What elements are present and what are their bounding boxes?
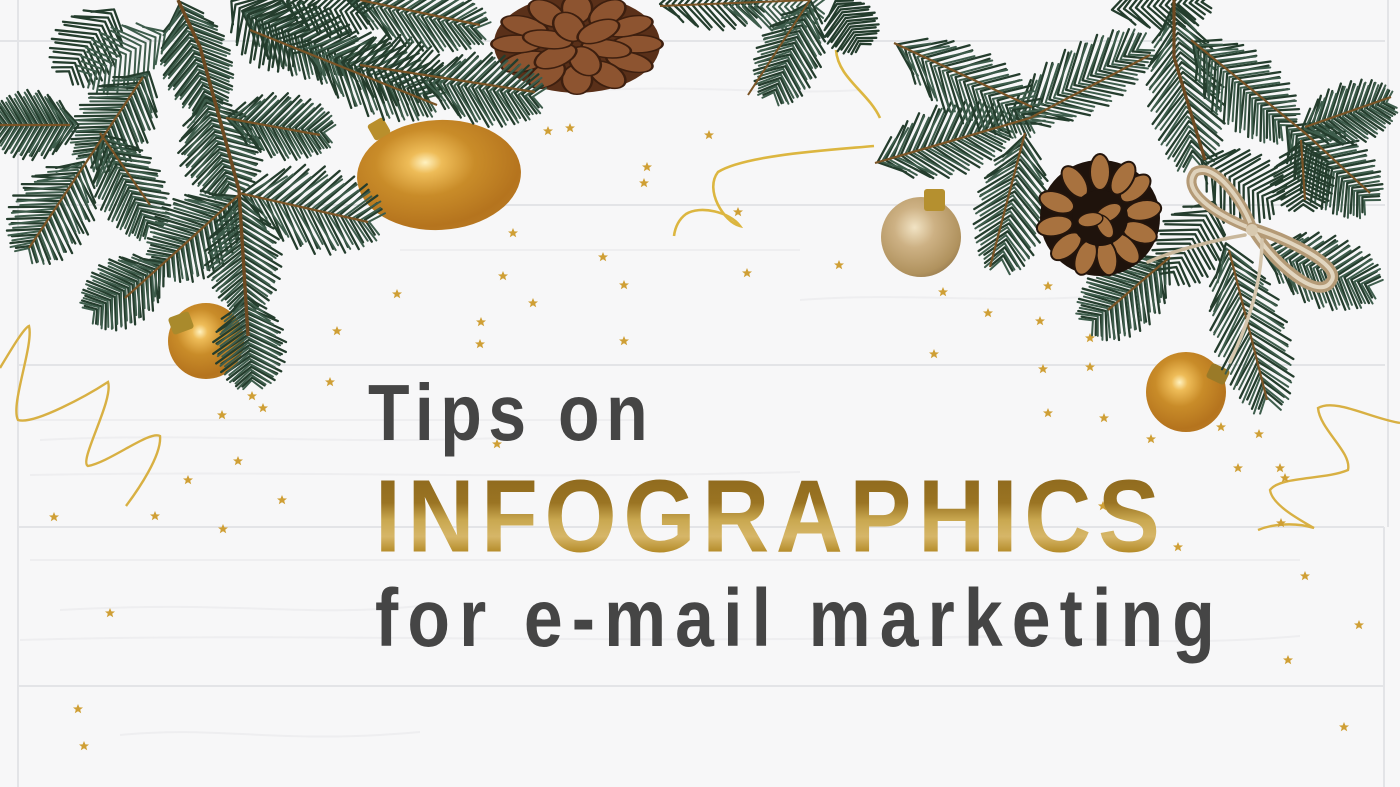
twine bow — [1148, 170, 1333, 362]
gold ribbon: center top — [836, 50, 880, 118]
gold ribbon: left — [0, 326, 160, 506]
title line: INFOGRAPHICS: INFOGRAPHICS — [375, 458, 1160, 574]
gold egg ornament — [354, 116, 524, 234]
pine branch: top center — [660, 0, 887, 113]
pine branch: right — [867, 0, 1400, 422]
scattered gold stars — [49, 123, 1364, 750]
pine cone: right — [1035, 154, 1163, 278]
pine cone: top — [491, 0, 663, 94]
gold ornament: right — [1146, 352, 1230, 432]
pine branch: top left — [0, 0, 549, 392]
title line: for e-mail marketing: for e-mail marketing — [375, 573, 1215, 664]
gold ornament: left — [168, 303, 244, 379]
title line: Tips on: Tips on — [368, 368, 648, 457]
glitter ornament — [881, 189, 961, 277]
gold ribbon: right — [1258, 405, 1400, 530]
gold ribbon: center — [674, 146, 874, 236]
